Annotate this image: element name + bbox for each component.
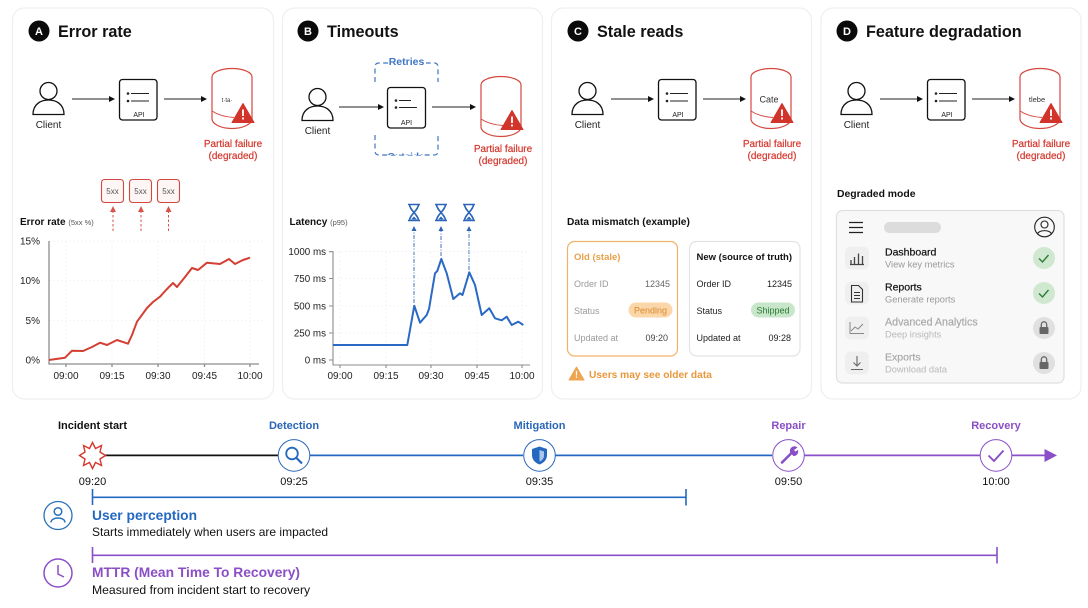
span: MTTR: MTTR (Mean Time To Recovery) — [92, 565, 300, 580]
diagram: client, API with retries, database — [302, 55, 533, 167]
app top bar — [849, 217, 1054, 237]
milestone: recovery — [971, 420, 1022, 488]
row: dashboard: View key metrics — [885, 260, 955, 270]
5xx error badges: 5xx — [106, 187, 119, 196]
panel: B timeouts — [282, 8, 542, 399]
diagram: client to API to database: t·ta· — [222, 98, 232, 104]
heading: B Timeouts: B — [304, 26, 312, 38]
card: old stale: Old (stale) — [574, 252, 620, 263]
hourglass timeout markers — [408, 204, 475, 303]
5xx error badges: 5xx — [162, 187, 175, 196]
line chart: latency: 09:00 — [327, 371, 353, 382]
line chart: latency: 0 ms — [305, 356, 326, 366]
panel: C stale reads — [552, 8, 812, 399]
card: new source of truth: Updated at — [696, 333, 741, 343]
card: old stale — [568, 242, 678, 356]
milestone: detection: 09:25 — [280, 476, 308, 488]
chart heading: Latency (p95) — [290, 217, 348, 228]
milestone: mitigation: 09:35 — [526, 476, 553, 488]
card: new source of truth: 12345 — [767, 279, 792, 289]
card: new source of truth — [690, 242, 800, 356]
milestone: incident start: 09:20 — [79, 476, 106, 488]
diagram: client to API to database: Partial failure — [1012, 139, 1071, 150]
row: dashboard — [845, 246, 1055, 270]
heading: D Feature degradation: D — [843, 26, 851, 38]
warning: users may see older data: Users may see older data — [589, 370, 712, 381]
diagram: client, API with retries, database: Client — [305, 126, 330, 137]
heading: C Stale reads: Stale reads — [597, 23, 683, 41]
diagram: client, API with retries, database: Outside — [387, 152, 425, 163]
span: MTTR: Measured from incident start to recovery — [92, 583, 311, 597]
card: new source of truth: Status — [696, 306, 723, 316]
card: new source of truth: New (source of truth) — [696, 252, 792, 263]
card: old stale: 09:20 — [645, 333, 668, 343]
line chart: error rate: 15% — [20, 236, 40, 248]
icon: user — [44, 502, 72, 530]
row: exports — [845, 352, 1055, 374]
heading: A Error rate — [28, 20, 132, 42]
milestone: mitigation — [514, 420, 566, 488]
diagram: client to API to database: Partial failure — [204, 139, 263, 150]
line chart: latency: 250 ms — [294, 328, 326, 340]
diagram: client, API with retries, database: API — [401, 120, 412, 127]
card: old stale: Updated at — [574, 333, 619, 343]
span: user perception: User perception — [92, 508, 197, 523]
milestone: incident start — [58, 420, 127, 488]
panel: D feature degradation — [821, 8, 1081, 399]
line chart: error rate — [20, 236, 263, 382]
line chart: error rate: 10:00 — [237, 371, 263, 382]
span: user perception: Starts immediately when users are impacted — [92, 525, 328, 539]
heading: A Error rate: A — [35, 26, 43, 38]
diagram: client to API to database: API — [941, 112, 953, 119]
milestone: incident start: Incident start — [58, 420, 127, 432]
milestone: mitigation: Mitigation — [514, 420, 566, 432]
milestone: repair: Repair — [771, 420, 806, 432]
line chart: error rate: 10% — [20, 276, 40, 287]
icon: clock — [44, 559, 72, 587]
diagram: client to API to database: (degraded) — [209, 151, 257, 162]
row: exports: Download data — [885, 364, 948, 374]
row: exports: Exports — [885, 352, 921, 364]
heading: C Stale reads: C — [574, 26, 582, 38]
milestone: recovery: 10:00 — [982, 476, 1010, 488]
card: new source of truth: 09:28 — [768, 333, 791, 343]
diagram: client to API to database — [33, 68, 263, 162]
row: dashboard: Dashboard — [885, 246, 937, 258]
line chart: error rate: 09:30 — [145, 371, 171, 382]
span: MTTR — [44, 547, 997, 597]
line chart: error rate: 5% — [26, 316, 40, 327]
diagram: client to API to database: Client — [844, 120, 869, 131]
incident timeline — [58, 420, 1057, 488]
card: old stale: Pending — [634, 306, 667, 316]
diagram: client to API to database: Client — [575, 120, 600, 131]
milestone: repair: 09:50 — [775, 476, 802, 488]
row: reports — [845, 282, 1055, 304]
heading: D Feature degradation: Feature degradation — [866, 23, 1022, 41]
diagram: client to API to database: (degraded) — [1017, 151, 1065, 162]
card: old stale: Status — [574, 306, 600, 316]
line chart: latency: 1000 ms — [288, 247, 326, 258]
diagram: client, API with retries, database: (degraded) — [479, 156, 527, 167]
line chart: error rate: 09:15 — [99, 371, 125, 382]
diagram: client to API to database — [572, 68, 802, 162]
heading: degraded mode: Degraded mode — [837, 189, 916, 200]
diagram: client to API to database: Client — [36, 120, 61, 131]
diagram: client to API to database: API — [133, 112, 145, 119]
milestone: detection — [269, 420, 319, 488]
row: reports: Reports — [885, 282, 922, 294]
line chart: latency: 09:45 — [464, 371, 490, 382]
milestone: repair — [771, 420, 806, 488]
card: old stale: 12345 — [645, 279, 670, 289]
panel: A error rate — [12, 8, 274, 399]
line chart: latency — [288, 247, 535, 382]
heading: A Error rate: Error rate — [58, 23, 132, 41]
diagram: client, API with retries, database: Partial failure — [474, 144, 533, 155]
card: old stale: Order ID — [574, 279, 609, 289]
row: advanced analytics — [845, 316, 1055, 340]
diagram: client, API with retries, database: Retries — [389, 56, 424, 68]
line chart: latency: 09:30 — [418, 371, 444, 382]
line chart: latency: 750 ms — [294, 274, 326, 285]
heading: B Timeouts: Timeouts — [327, 23, 399, 41]
heading: data mismatch: Data mismatch (example) — [567, 217, 690, 228]
diagram: client to API to database: API — [672, 112, 684, 119]
diagram: client to API to database: (degraded) — [748, 151, 796, 162]
card: new source of truth: Shipped — [756, 306, 790, 316]
diagram: client to API to database: Partial failure — [743, 139, 802, 150]
line chart: error rate: 09:00 — [53, 371, 79, 382]
chart heading: Error rate (5xx %) — [20, 217, 94, 228]
span: user perception — [44, 489, 686, 539]
5xx error badges — [102, 180, 180, 231]
line chart: error rate: 09:45 — [192, 371, 217, 382]
line chart: error rate: 0% — [26, 356, 40, 366]
app mockup — [836, 210, 1064, 383]
card: new source of truth: Order ID — [696, 279, 732, 289]
row: advanced analytics: Deep insights — [885, 330, 942, 340]
milestone: recovery: Recovery — [971, 420, 1022, 432]
diagram: client to API to database: tlebe — [1029, 95, 1045, 104]
milestone: detection: Detection — [269, 420, 319, 432]
row: reports: Generate reports — [885, 294, 956, 304]
5xx error badges: 5xx — [134, 187, 147, 196]
warning: users may see older data — [569, 367, 712, 381]
heading: C Stale reads — [568, 20, 683, 42]
diagram: client to API to database — [841, 68, 1071, 162]
line chart: latency: 10:00 — [509, 371, 535, 382]
diagram: client to API to database: Cate — [759, 94, 779, 104]
row: advanced analytics: Advanced Analytics — [885, 316, 978, 328]
line chart: latency: 09:15 — [373, 371, 399, 382]
line chart: latency: 500 ms — [294, 302, 326, 312]
heading: B Timeouts — [298, 20, 399, 42]
